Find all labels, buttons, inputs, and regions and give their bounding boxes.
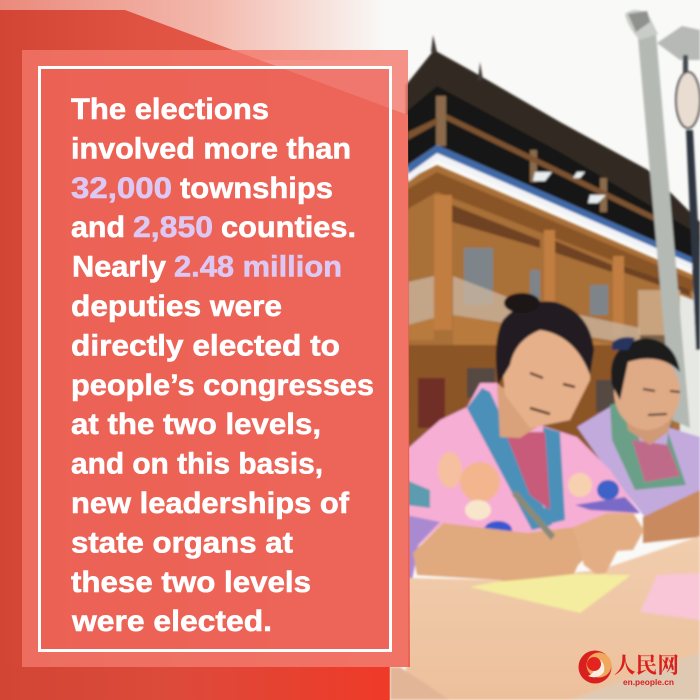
- house ground floor wall: [406, 165, 693, 470]
- main text block: at the two levels,: [71, 408, 321, 441]
- main text block: state organs at: [71, 526, 293, 559]
- table: [390, 536, 700, 700]
- translucent text panel: [22, 50, 408, 667]
- red band bottom strip: [0, 667, 389, 700]
- main text block: involved more than: [71, 132, 351, 165]
- far background behind the house: [680, 295, 700, 440]
- white panel frame: [40, 68, 390, 650]
- icon: logo emblem: [578, 650, 612, 684]
- street lamp: [625, 10, 700, 428]
- main text block: these two levels: [71, 566, 311, 599]
- red overlay band: [0, 10, 410, 700]
- photo: village house and two women: [390, 10, 700, 700]
- woman right: [577, 337, 700, 543]
- main text block: and on this basis,: [71, 448, 323, 481]
- woman left: dress: [406, 383, 640, 580]
- main text block: 2,850: [133, 211, 213, 244]
- main text block: people’s congresses: [71, 369, 374, 402]
- main text block: directly elected to: [71, 329, 340, 362]
- main text block: new leaderships of: [71, 487, 350, 520]
- main text block: 2.48 million: [174, 251, 342, 284]
- People's Daily Online logo: [578, 649, 679, 687]
- top fade: [0, 0, 420, 60]
- house upper storey: [406, 35, 700, 270]
- main text block: Nearly: [72, 251, 166, 284]
- main text block: and: [71, 211, 125, 244]
- logo web address: en.people.cn: [623, 677, 674, 687]
- main text block: 32,000: [71, 172, 172, 205]
- woman left: face, hair and arms: [413, 293, 700, 620]
- main text block: townships: [180, 172, 333, 205]
- main text block: [71, 93, 374, 638]
- main text block: counties.: [221, 211, 356, 244]
- main text block: The elections: [71, 93, 269, 126]
- blue and white eave band: [408, 145, 693, 270]
- main text block: were elected.: [71, 605, 272, 638]
- main text block: deputies were: [71, 290, 282, 323]
- logo Chinese name: 人民网: [614, 649, 679, 680]
